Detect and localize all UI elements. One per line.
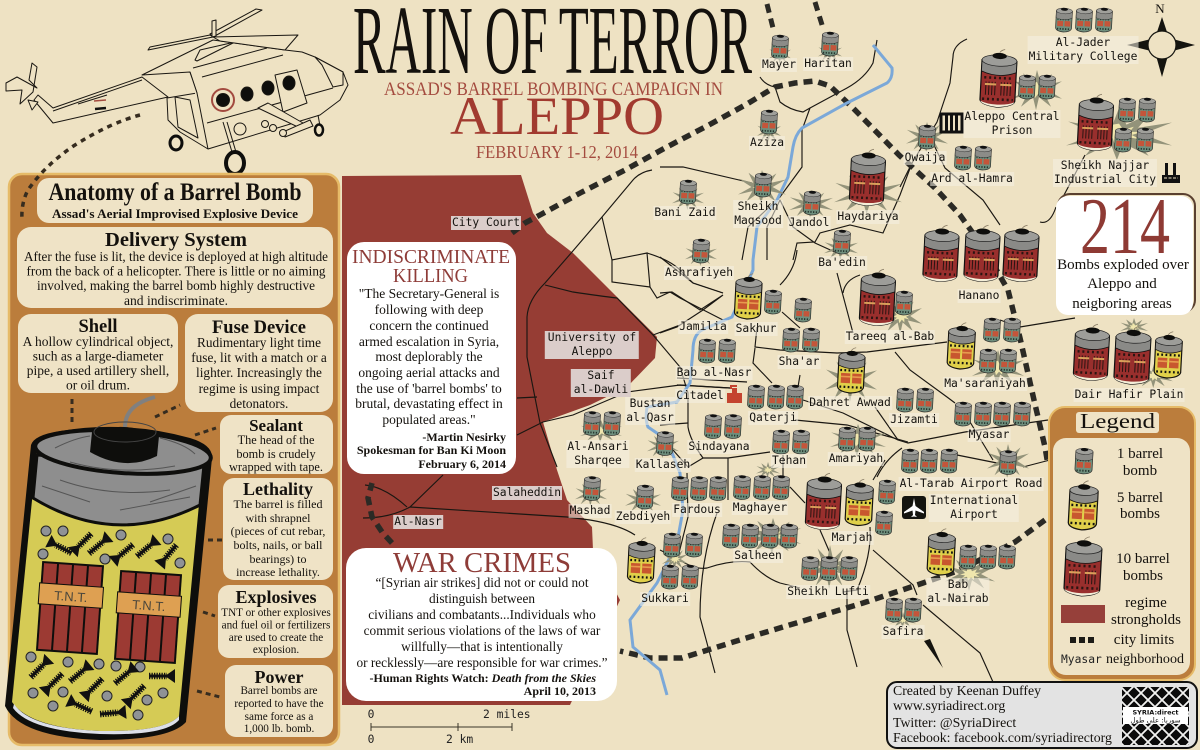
- neighborhood labels: Haritan: [804, 57, 852, 70]
- stat number: 214: [1080, 183, 1170, 271]
- site: Salheen: [722, 518, 801, 554]
- neighborhood labels: Tareeq al-Bab: [846, 330, 934, 343]
- box: fuse device: Fuse Device: [212, 318, 306, 338]
- site: Jandol: [789, 190, 833, 218]
- neighborhood labels: Ashrafiyeh: [665, 266, 733, 279]
- box: shell: A hollow cylindrical object,: [23, 334, 173, 349]
- explosives: right TNT bundle: [113, 570, 183, 664]
- box: shell: pipe, a used artillery shell,: [27, 363, 169, 378]
- scale bar: 0: [368, 733, 375, 746]
- site: Al-Jader Military College: [1055, 7, 1113, 32]
- credits text: Created by Keenan Duffey: [893, 683, 1041, 698]
- heading: [352, 246, 510, 287]
- site: Ard al-Hamra: [954, 145, 992, 170]
- site: Sheikh Maqsood: [738, 170, 786, 204]
- box: fuse device: Rudimentary light time: [197, 335, 321, 350]
- box: fuse device: lighter. Increasingly the: [196, 365, 322, 380]
- quote: most deplorably the: [375, 349, 483, 364]
- box: explosives: and fuel oil or fertilizers: [222, 620, 330, 632]
- site: Sheikh Najjar: [1066, 93, 1172, 160]
- neighborhood labels: Qaterji: [749, 411, 797, 424]
- legend: neighborhood: [1061, 652, 1184, 667]
- site: Bab al-Nairab: [927, 528, 1016, 591]
- neighborhood labels: Saif: [587, 369, 615, 382]
- scale bar: [368, 708, 531, 746]
- box: power: reported to have the: [234, 698, 324, 710]
- site: Fardous: [671, 476, 727, 501]
- quote: armed escalation in Syria,: [359, 334, 499, 349]
- box: lethality: increase lethality.: [236, 565, 320, 579]
- map: city limits, northern dashes: [767, 2, 823, 28]
- site: Mashad: [575, 476, 607, 506]
- box: sealant: [220, 415, 333, 474]
- neighborhood labels: Al-Ansari: [567, 440, 629, 453]
- legend: 5 barrels: [1068, 480, 1163, 531]
- legend: 10 barrels: bombs: [1123, 568, 1163, 584]
- legend: city limits: [1070, 632, 1174, 648]
- site: Bab al-Nasr: [698, 338, 736, 363]
- box: sealant: wrapped with tape.: [229, 460, 323, 474]
- neighborhood labels: Sheikh: [738, 200, 778, 213]
- scale bar: 2 miles: [483, 708, 531, 721]
- legend: neighborhood: Myasar: [1061, 653, 1102, 666]
- legend: 1 barrel: 1 barrel: [1117, 446, 1163, 462]
- explosives: left TNT bundle: T.N.T.: [54, 588, 88, 605]
- neighborhood labels: Aziza: [750, 136, 784, 149]
- neighborhood labels: al-Qasr: [626, 411, 674, 424]
- neighborhood labels: Bani Zaid: [654, 206, 716, 219]
- site: Safira: [885, 597, 922, 628]
- legend: neighborhood: neighborhood: [1106, 652, 1184, 667]
- attribution: -Martin Nesirky: [422, 430, 506, 444]
- neighborhood labels: Fardous: [673, 503, 721, 516]
- site: Dair Hafir Plain: [1073, 318, 1183, 388]
- neighborhood labels: Military College: [1029, 50, 1137, 63]
- neighborhood labels: Ba'edin: [818, 256, 866, 269]
- box: fuse device: fuse, lit with a match or a: [191, 350, 327, 365]
- box: lethality: [223, 478, 333, 580]
- neighborhood labels: Aleppo Central: [964, 110, 1060, 123]
- site: Haritan: [818, 31, 842, 62]
- scale bar: 0: [368, 708, 375, 721]
- box: sealant: The head of the: [238, 433, 315, 447]
- neighborhood labels: Mashad: [570, 504, 610, 517]
- illustration: cutaway barrel bomb: [5, 397, 212, 740]
- dotted line from helicopter to panel: [22, 115, 140, 220]
- box: lethality: Lethality: [243, 479, 313, 499]
- box: lethality: bearings) to: [250, 552, 306, 566]
- box: lethality: with shrapnel: [246, 511, 311, 525]
- neighborhood labels: Bab al-Nasr: [677, 366, 751, 379]
- quote: commit serious violations of the laws of war: [364, 623, 601, 638]
- neighborhood labels: al-Dawli: [574, 383, 628, 396]
- subtitle: ASSAD'S BARREL BOMBING CAMPAIGN IN: [384, 79, 723, 100]
- legend: 10 barrels: [1064, 536, 1170, 597]
- box: power: [225, 665, 333, 737]
- quote: [355, 286, 503, 427]
- quote: willfully—that is intentionally: [401, 639, 563, 654]
- quote: or recklessly—are responsible for war crimes.”: [356, 655, 608, 670]
- box: power: 1,000 lb. bomb.: [244, 723, 314, 735]
- site: Sheikh Lufti: [801, 545, 858, 589]
- compass rose: [1127, 1, 1195, 77]
- panel: credits: [887, 682, 1197, 748]
- attribution: -Human Rights Watch: Death from the Skies: [370, 671, 596, 685]
- map: city limits: [368, 81, 1048, 658]
- box: delivery system: After the fuse is lit, the device is deployed at high altitude: [24, 249, 328, 264]
- credits text: Twitter: @SyriaDirect: [893, 715, 1016, 730]
- neighborhood labels: Jandol: [789, 216, 829, 229]
- site: Mayer: [769, 34, 791, 64]
- neighborhood labels: Aleppo: [572, 345, 612, 358]
- neighborhood labels: Jizamti: [890, 413, 938, 426]
- credits text: www.syriadirect.org: [893, 698, 1005, 713]
- box: delivery system: Delivery System: [105, 229, 247, 251]
- box: explosives: Explosives: [235, 587, 317, 607]
- site: Ashrafiyeh: [685, 238, 717, 266]
- quote: following with deep: [375, 302, 484, 317]
- neighborhood labels: Bab: [948, 578, 968, 591]
- site: Ma'saraniyah: [947, 317, 1024, 386]
- box: shell: or oil drum.: [66, 378, 130, 392]
- site: Sha'ar: [782, 297, 820, 352]
- neighborhood labels: Industrial City: [1054, 173, 1156, 186]
- legend: 5 barrels: bombs: [1120, 506, 1160, 522]
- stat caption: neigboring areas: [1072, 296, 1172, 312]
- stat caption: Aleppo and: [1087, 276, 1157, 292]
- neighborhood labels: Ma'saraniyah: [944, 377, 1026, 390]
- legend: 10 barrels: 10 barrel: [1116, 551, 1170, 567]
- neighborhood labels: Sha'ar: [779, 355, 819, 368]
- neighborhood labels: Safira: [883, 625, 923, 638]
- helicopter: [6, 9, 348, 174]
- icon: factory: [1162, 163, 1180, 183]
- credits text: Facebook: facebook.com/syriadirectorg: [893, 730, 1112, 745]
- credits text: [893, 683, 1112, 745]
- neighborhood labels: Bustan: [630, 397, 670, 410]
- neighborhood labels: City Court: [452, 216, 520, 229]
- attribution: April 10, 2013: [524, 684, 596, 698]
- legend title: Legend: [1080, 409, 1156, 433]
- neighborhood labels: al-Nairab: [927, 592, 989, 605]
- neighborhood labels: Sukkari: [641, 592, 689, 605]
- attribution: Spokesman for Ban Ki Moon: [357, 443, 506, 457]
- site: Bani Zaid: [672, 179, 704, 210]
- box: power: Barrel bombs are: [240, 685, 318, 697]
- title: [353, 0, 752, 162]
- box: lethality: The barrel is filled: [234, 497, 322, 511]
- panel: war crimes: [346, 547, 617, 701]
- quote: "The Secretary-General is: [359, 286, 499, 301]
- neighborhood labels: Sindayana: [688, 440, 750, 453]
- panel: indiscriminate killing: [347, 242, 516, 474]
- attribution: [370, 671, 596, 698]
- neighborhood labels: Al-Tarab Airport Road: [900, 477, 1042, 490]
- neighborhood labels: University of: [548, 331, 636, 344]
- neighborhood labels: Sharqee: [574, 454, 622, 467]
- quote: “[Syrian air strikes] did not or could not: [375, 575, 589, 590]
- neighborhood labels: Maghayer: [733, 501, 787, 514]
- box: delivery system: from the back of a helicopter. There is little or no aiming: [26, 264, 326, 278]
- heading: KILLING: [393, 265, 468, 287]
- site: Amariyah: [830, 424, 886, 456]
- quote: distinguish between: [429, 591, 535, 606]
- logo: Syria Direct: SYRIA:direct: [1132, 708, 1179, 716]
- quote: populated areas.": [382, 412, 476, 427]
- explosives: right TNT bundle: T.N.T.: [132, 597, 166, 614]
- map: regime strongholds: [342, 175, 657, 705]
- icon: airplane: [902, 496, 926, 519]
- stat caption: [1057, 257, 1189, 312]
- shrapnel: screws: [26, 529, 182, 721]
- heading: INDISCRIMINATE: [352, 246, 510, 268]
- date: FEBRUARY 1-12, 2014: [476, 142, 638, 162]
- neighborhood labels: Dair Hafir Plain: [1075, 388, 1183, 401]
- site: Al-Tarab: [901, 448, 958, 473]
- quote: brutal, devastating effect in: [355, 396, 503, 411]
- quote: [356, 575, 608, 670]
- map: road network: [363, 39, 1085, 682]
- neighborhood labels: International: [930, 494, 1018, 507]
- box: power: same force as a: [245, 711, 313, 723]
- neighborhood labels: Owaija: [905, 151, 945, 164]
- heading: WAR CRIMES: [393, 547, 571, 579]
- neighborhood labels: Ard al-Hamra: [931, 172, 1013, 185]
- neighborhood labels: Hanano: [959, 289, 999, 302]
- logo: Syria Direct: [1122, 687, 1189, 745]
- quote: concern the continued: [369, 318, 489, 333]
- site: Aziza: [757, 109, 781, 142]
- site: Tareeq al-Bab: [859, 268, 922, 334]
- box: delivery system: and indiscriminate.: [124, 293, 228, 308]
- box: shell: Shell: [78, 317, 118, 337]
- site: Haydariya: [834, 148, 902, 214]
- box: fuse device: detonators.: [230, 396, 288, 411]
- box: explosives: TNT or other explosives: [221, 607, 331, 619]
- neighborhood labels: Jamilia: [679, 320, 727, 333]
- site: Sakhur: [734, 273, 782, 320]
- attribution: February 6, 2014: [418, 457, 506, 471]
- box: explosives: are used to create the: [229, 632, 323, 644]
- panel: anatomy of a barrel bomb: [5, 174, 339, 745]
- site: Tehan: [772, 429, 810, 454]
- box: delivery system: [17, 227, 333, 308]
- neighborhood labels: Dahret Awwad: [809, 396, 891, 409]
- legend: strongholds: strongholds: [1111, 612, 1181, 628]
- quote: ongoing aerial attacks and: [358, 365, 500, 380]
- site: Myasar: [954, 401, 1031, 426]
- neighborhood labels: Sakhur: [736, 322, 776, 335]
- box: sealant: Sealant: [249, 416, 303, 435]
- site: Sindayana: [704, 414, 742, 439]
- box: lethality: (pieces of cut rebar,: [231, 524, 325, 538]
- site: Al-Ansari Sharqee: [580, 411, 622, 442]
- connector dashes: [72, 399, 224, 697]
- box: fuse device: regime is using impact: [199, 381, 320, 396]
- shrapnel: ball bearings: [26, 526, 185, 720]
- site: Jizamti: [896, 387, 934, 412]
- box: shell: such as a large-diameter: [33, 348, 164, 364]
- site: Dahret Awwad: [825, 347, 877, 402]
- neighborhood labels: Amariyah: [829, 452, 883, 465]
- neighborhood labels: Salheen: [734, 549, 782, 562]
- heading box: Assad's Aerial Improvised Explosive Device: [52, 207, 298, 221]
- map: black wedge: [924, 639, 943, 668]
- neighborhood labels: Al-Jader: [1056, 36, 1110, 49]
- scale bar: 2 km: [446, 733, 473, 746]
- site: Sukkari: [627, 532, 703, 589]
- neighborhood labels: Tehan: [772, 454, 806, 467]
- neighborhood labels: Mayer: [762, 58, 796, 71]
- quote: the use of 'barrel bombs' to: [356, 381, 502, 396]
- legend: 1 barrel: bomb: [1123, 463, 1157, 479]
- box: lethality: bolts, nails, or ball: [234, 538, 323, 552]
- neighborhood labels: Kallaseh: [636, 458, 690, 471]
- box: sealant: bomb is crudely: [236, 447, 316, 461]
- neighborhood labels: Marjah: [832, 531, 872, 544]
- heading box: Anatomy of a Barrel Bomb: [48, 179, 302, 206]
- box: shell: [18, 314, 178, 393]
- icon: citadel: [727, 385, 742, 403]
- site: Marjah: [805, 472, 896, 535]
- box: delivery system: involved, making the barrel bomb highly destructive: [37, 278, 315, 293]
- site: Ba'edin: [824, 229, 858, 260]
- site: Kallaseh: [647, 431, 679, 458]
- neighborhood labels: Al-Nasr: [394, 515, 442, 528]
- legend: strongholds: regime: [1125, 595, 1167, 611]
- compass rose: N: [1155, 1, 1165, 16]
- box: power: Power: [255, 667, 303, 687]
- bombing sites: [575, 7, 1183, 628]
- heading: Aleppo: ALEPPO: [450, 86, 664, 146]
- neighborhood labels: Citadel: [676, 389, 724, 402]
- neighborhood labels: Sheikh Najjar: [1061, 159, 1149, 172]
- stat caption: Bombs exploded over: [1057, 257, 1189, 273]
- neighborhood labels: Airport: [950, 508, 998, 521]
- neighborhood labels: Prison: [992, 124, 1032, 137]
- logo: Syria Direct: سوريا: على طول: [1130, 716, 1181, 724]
- panel: legend: [1049, 407, 1195, 680]
- neighborhood labels: Salaheddin: [493, 486, 561, 499]
- site: Qaterji: [747, 384, 804, 409]
- explosives: left TNT bundle: [35, 561, 105, 655]
- neighborhood labels: Myasar: [969, 428, 1009, 441]
- neighborhood labels: Zebdiyeh: [616, 510, 670, 523]
- site: Owaija: [906, 122, 948, 152]
- attribution: [357, 430, 506, 471]
- site: Aleppo Central Prison: [980, 48, 1062, 110]
- neighborhood labels: Maqsood: [734, 214, 782, 227]
- site: Airport Road: [987, 444, 1029, 478]
- box: fuse device: [185, 314, 333, 412]
- heading box: [37, 178, 313, 223]
- panel: 214 bombs: [1056, 183, 1195, 315]
- legend: strongholds: [1061, 595, 1181, 628]
- site: Hanano: [923, 224, 1039, 282]
- box: explosives: [218, 585, 333, 658]
- neighborhood labels: Haydariya: [837, 210, 899, 223]
- neighborhood labels: Sheikh Lufti: [787, 585, 869, 598]
- icon: prison: [941, 114, 962, 132]
- legend: 5 barrels: 5 barrel: [1117, 490, 1163, 506]
- site: Zebdiyeh: [625, 484, 661, 513]
- legend: 1 barrel: [1075, 446, 1163, 479]
- map: Queiq river: [630, 45, 892, 695]
- site: Maghayer: [733, 462, 790, 500]
- box: explosives: explosion.: [253, 644, 299, 656]
- legend: city limits: city limits: [1114, 632, 1174, 648]
- quote: civilians and combatants...Individuals who: [368, 607, 596, 622]
